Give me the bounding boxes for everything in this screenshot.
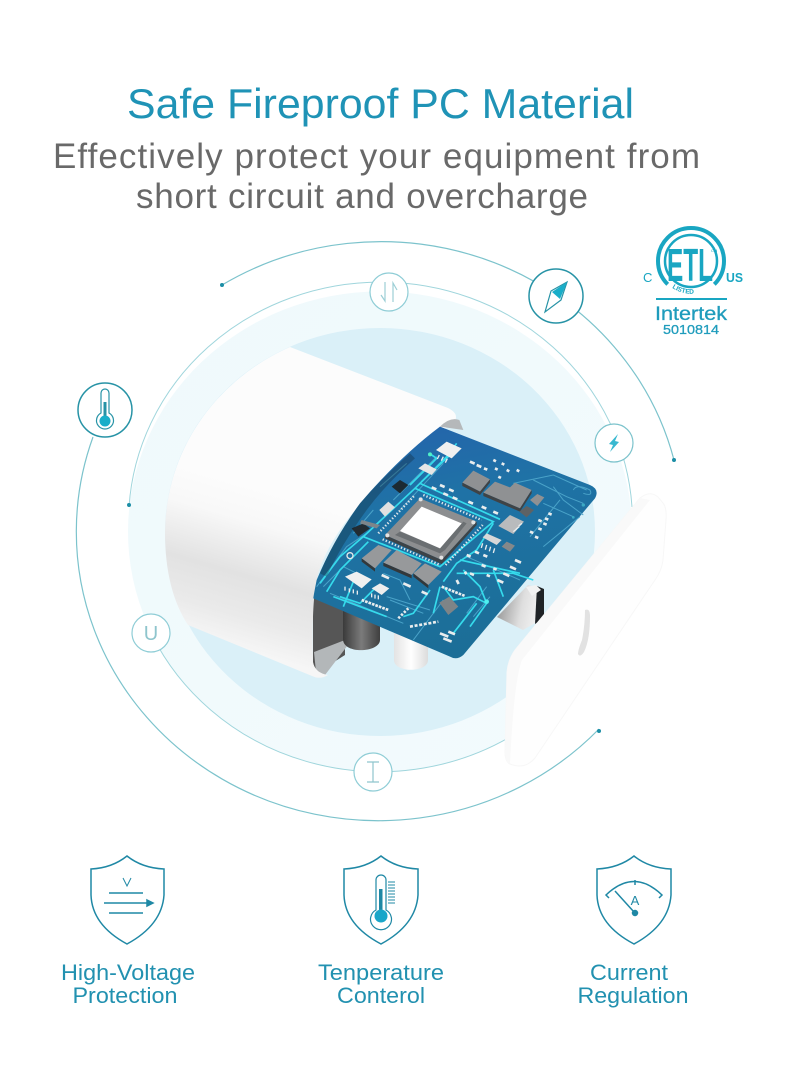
feature: high-voltage protection [61, 856, 195, 1008]
pale outer band [128, 292, 632, 772]
solder ring [347, 553, 353, 559]
charger body [165, 347, 456, 678]
feature: temperature control [318, 856, 444, 1008]
ETL certification badge: LISTED [672, 284, 694, 294]
ETL certification badge: Intertek [655, 304, 728, 325]
shell shadow over board edge [320, 453, 415, 577]
ETL certification badge: C [643, 270, 652, 285]
circuit board [313, 419, 597, 658]
interior dark pillar [313, 595, 345, 672]
label [61, 960, 195, 1008]
label [318, 960, 444, 1008]
feature: current regulation [578, 856, 688, 1008]
ETL certification badge: US [726, 270, 743, 285]
outer arc upper [222, 242, 674, 460]
pale blue inner disc [165, 328, 595, 736]
label: High-Voltage [61, 960, 195, 985]
icon: I symbol [354, 753, 392, 791]
ETL certification badge [643, 226, 743, 337]
label: Protection [72, 983, 178, 1008]
pins and small pads [345, 455, 552, 642]
glowing traces [320, 443, 533, 633]
interior floor [314, 640, 348, 675]
usb-c connector [497, 585, 544, 630]
charging slot [578, 610, 590, 656]
icon: data arrows [370, 273, 408, 311]
label: Tenperature [318, 960, 444, 985]
chip pins [378, 495, 483, 565]
charger interior [313, 595, 428, 675]
ETL certification badge: ETL [667, 239, 713, 291]
title: Safe Fireproof PC Material [127, 80, 634, 127]
middle ring lower line [151, 633, 510, 772]
diagram rings [76, 242, 676, 821]
middle ring line [129, 282, 632, 507]
label: Conterol [337, 983, 425, 1008]
outer arc lower [76, 437, 599, 821]
ETL certification badge: CM [711, 248, 717, 253]
shell rim [440, 419, 463, 430]
icon: compass [529, 269, 583, 323]
label [578, 960, 688, 1008]
label: Current [590, 960, 668, 985]
gauge letter: A [631, 893, 640, 908]
icon: shield with gauge [597, 856, 671, 944]
label: Regulation [578, 983, 688, 1008]
main processor [378, 495, 483, 565]
icon: shield with thermometer [344, 856, 418, 944]
arc end dots [127, 283, 676, 733]
icon: U symbol [132, 614, 170, 652]
icon: shield with V [91, 856, 164, 944]
subtitle: short circuit and overcharge [136, 177, 588, 216]
glow spots and dots [428, 452, 585, 604]
darker fine traces [317, 457, 591, 640]
icon: U symbol: U [144, 623, 158, 645]
subtitle: Effectively protect your equipment from [53, 137, 700, 176]
black cylinder [343, 610, 380, 650]
board outline [313, 427, 597, 658]
icon: bolt [595, 424, 633, 462]
grey components [345, 442, 544, 615]
white cylinder [394, 630, 428, 670]
ETL certification badge: 5010814 [663, 322, 719, 337]
subtitle [53, 137, 700, 216]
front plate [505, 494, 666, 766]
icon: thermometer [78, 383, 132, 437]
